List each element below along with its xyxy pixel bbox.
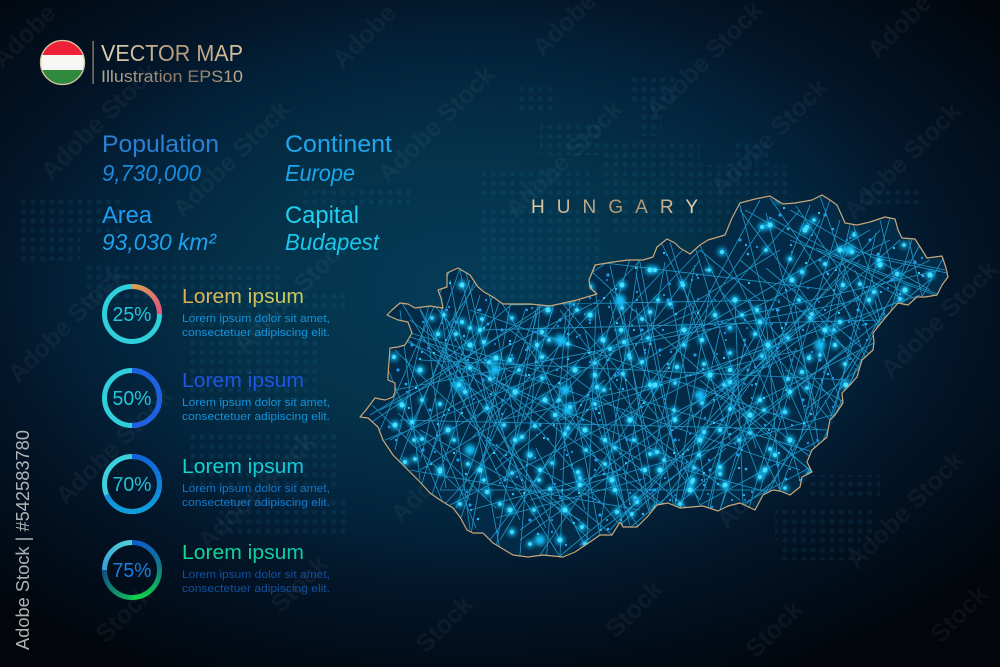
item: 75% text: Lorem ipsum (182, 542, 304, 564)
stat: capital (285, 202, 381, 255)
watermarks: Adobe Stock (875, 255, 1000, 383)
item: 25% text: consectetuer adipiscing elit. (182, 327, 330, 339)
map of Hungary (360, 193, 972, 574)
donut: 50% (104, 370, 160, 426)
item: 70% text: Lorem ipsum dolor sit amet, (182, 483, 330, 495)
item: 50% text: consectetuer adipiscing elit. (182, 411, 330, 423)
stat: continent: Europe (285, 160, 355, 186)
watermarks: Adobe Stock (35, 57, 163, 185)
watermarks: Adobe Stock (50, 382, 178, 510)
item: 75% text (182, 542, 330, 595)
stat: population (102, 131, 219, 186)
item: 75% text: consectetuer adipiscing elit. (182, 583, 330, 595)
stat: area: Area (102, 202, 153, 229)
divider (92, 41, 94, 84)
watermarks: Adobe Stock (372, 60, 500, 188)
item: 25% text: Lorem ipsum (182, 286, 304, 308)
donut: 75% (104, 542, 159, 598)
map: network lines and glowing nodes (370, 196, 946, 556)
stock id label: Adobe Stock | #542583780 (12, 430, 33, 650)
item: 25% text (182, 286, 330, 339)
donut: 70%: 70% (112, 474, 152, 496)
donut: 75%: 75% (112, 560, 152, 582)
stat: area (102, 202, 217, 255)
donut: 25% (104, 286, 160, 342)
stat: population: 9,730,000 (102, 160, 201, 186)
watermarks: Adobe Stock (385, 400, 513, 528)
item: 25% text: Lorem ipsum dolor sit amet, (182, 313, 330, 325)
watermarks: Adobe Stock (192, 427, 320, 555)
stat: capital: Budapest (285, 229, 381, 255)
watermarks: Adobe Stock (841, 446, 969, 574)
watermarks: Adobe Stock (2, 260, 130, 388)
item: 70% text: Lorem ipsum (182, 456, 304, 478)
item: 70% text: consectetuer adipiscing elit. (182, 497, 330, 509)
item: 50% text (182, 370, 330, 423)
donut: 50%: 50% (112, 388, 152, 410)
watermarks: Stock (925, 580, 993, 648)
donut: 25%: 25% (112, 304, 152, 326)
subtitle: Illustration EPS10 (101, 67, 243, 86)
watermarks: Adobe Stock (711, 406, 839, 534)
item: 70% text (182, 456, 330, 509)
icon: Hungarian flag (40, 40, 85, 85)
item: 75% text: Lorem ipsum dolor sit amet, (182, 569, 330, 581)
watermarks: Stock (90, 580, 158, 648)
watermarks: Stock (410, 590, 478, 658)
item: 50% text: Lorem ipsum (182, 370, 304, 392)
title: VECTOR MAP (101, 40, 243, 66)
watermarks: Adobe Stock (838, 97, 966, 225)
background: dotted world map (20, 78, 920, 560)
watermarks: Adobe Stock (167, 95, 295, 223)
map: base fill (360, 195, 948, 557)
watermarks: Adobe Stock (705, 73, 833, 201)
stat: population: Population (102, 131, 219, 158)
stat: capital: Capital (285, 202, 359, 229)
country name: HUNGARY (531, 197, 698, 218)
watermarks: Stock (600, 575, 668, 643)
stat: continent: Continent (285, 131, 392, 158)
watermarks: Adobe Stock (640, 0, 768, 124)
stat: continent (285, 131, 392, 186)
watermarks: Stock (265, 550, 333, 618)
stat: area: 93,030 km² (102, 229, 217, 255)
watermarks: Adobe (327, 0, 402, 74)
watermarks: Adobe Stock (228, 230, 356, 358)
watermarks: Stock (740, 595, 808, 663)
item: 50% text: Lorem ipsum dolor sit amet, (182, 397, 330, 409)
donut: 70% (104, 456, 160, 512)
map: gold border (360, 195, 948, 557)
watermarks: Adobe Stock (500, 95, 628, 223)
